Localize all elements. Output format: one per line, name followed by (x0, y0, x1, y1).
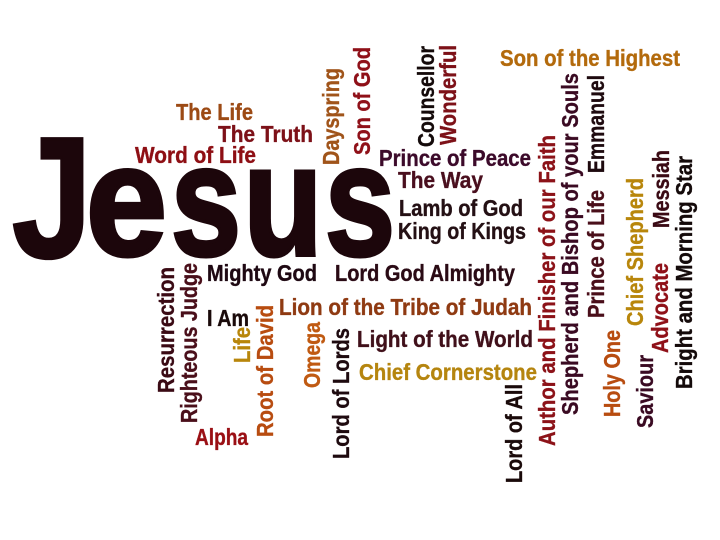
word: Advocate (vertical): Advocate (647, 263, 673, 353)
word: The Way: The Way (398, 167, 483, 193)
main word: Jesus: J (12, 102, 92, 294)
word: Mighty God: Mighty God (207, 260, 317, 286)
word: Holy One (vertical): Holy One (599, 330, 625, 417)
word: Omega (vertical): Omega (299, 322, 325, 388)
word: Life (vertical): Life (229, 327, 255, 363)
word: Lamb of God: Lamb of God (399, 195, 523, 221)
word: Author and Finisher of our Faith (vertical): Author and Finisher of our Faith (534, 135, 560, 446)
word: Word of Life: Word of Life (135, 142, 256, 168)
main word: Jesus: e (86, 113, 167, 289)
word: Messiah (vertical): Messiah (648, 150, 674, 228)
word: Emmanuel (vertical): Emmanuel (583, 75, 609, 173)
word: Light of the World: Light of the World (357, 326, 533, 352)
word: Son of the Highest: Son of the Highest (500, 45, 680, 71)
word: Righteous Judge (vertical): Righteous Judge (176, 263, 202, 423)
main word: Jesus: u (244, 113, 322, 289)
word: King of Kings: King of Kings (398, 218, 526, 244)
word: Counsellor (vertical): Counsellor (413, 46, 439, 147)
word: Prince of Peace: Prince of Peace (379, 145, 531, 171)
word: Son of God (vertical): Son of God (349, 47, 375, 155)
word: Chief Cornerstone: Chief Cornerstone (359, 359, 537, 385)
word: Chief Shepherd (vertical): Chief Shepherd (622, 178, 648, 326)
main word: Jesus (12, 102, 395, 294)
word: Bright and Morning Star (vertical): Bright and Morning Star (671, 156, 697, 389)
main word: Jesus: s (325, 113, 395, 289)
word: Prince of Life (vertical): Prince of Life (583, 190, 609, 318)
word: Shepherd and Bishop of your Souls (vertical): Shepherd and Bishop of your Souls (557, 73, 583, 415)
word: Lord of Lords (vertical): Lord of Lords (328, 328, 354, 459)
word: Root of David (vertical): Root of David (252, 305, 278, 437)
word: Resurrection (vertical): Resurrection (153, 267, 179, 393)
word: I Am: I Am (207, 305, 249, 331)
word: Lion of the Tribe of Judah: Lion of the Tribe of Judah (279, 294, 532, 320)
word: The Truth: The Truth (218, 121, 313, 147)
word: Wonderful (vertical): Wonderful (435, 45, 461, 145)
word: Alpha: Alpha (195, 424, 248, 450)
word: Lord of All (vertical): Lord of All (501, 384, 527, 483)
main word: Jesus: s (171, 113, 241, 289)
word: Saviour (vertical): Saviour (632, 355, 658, 428)
word: Lord God Almighty: Lord God Almighty (335, 260, 515, 286)
word: Dayspring (vertical): Dayspring (318, 68, 344, 165)
word: The Life: The Life (176, 99, 253, 125)
